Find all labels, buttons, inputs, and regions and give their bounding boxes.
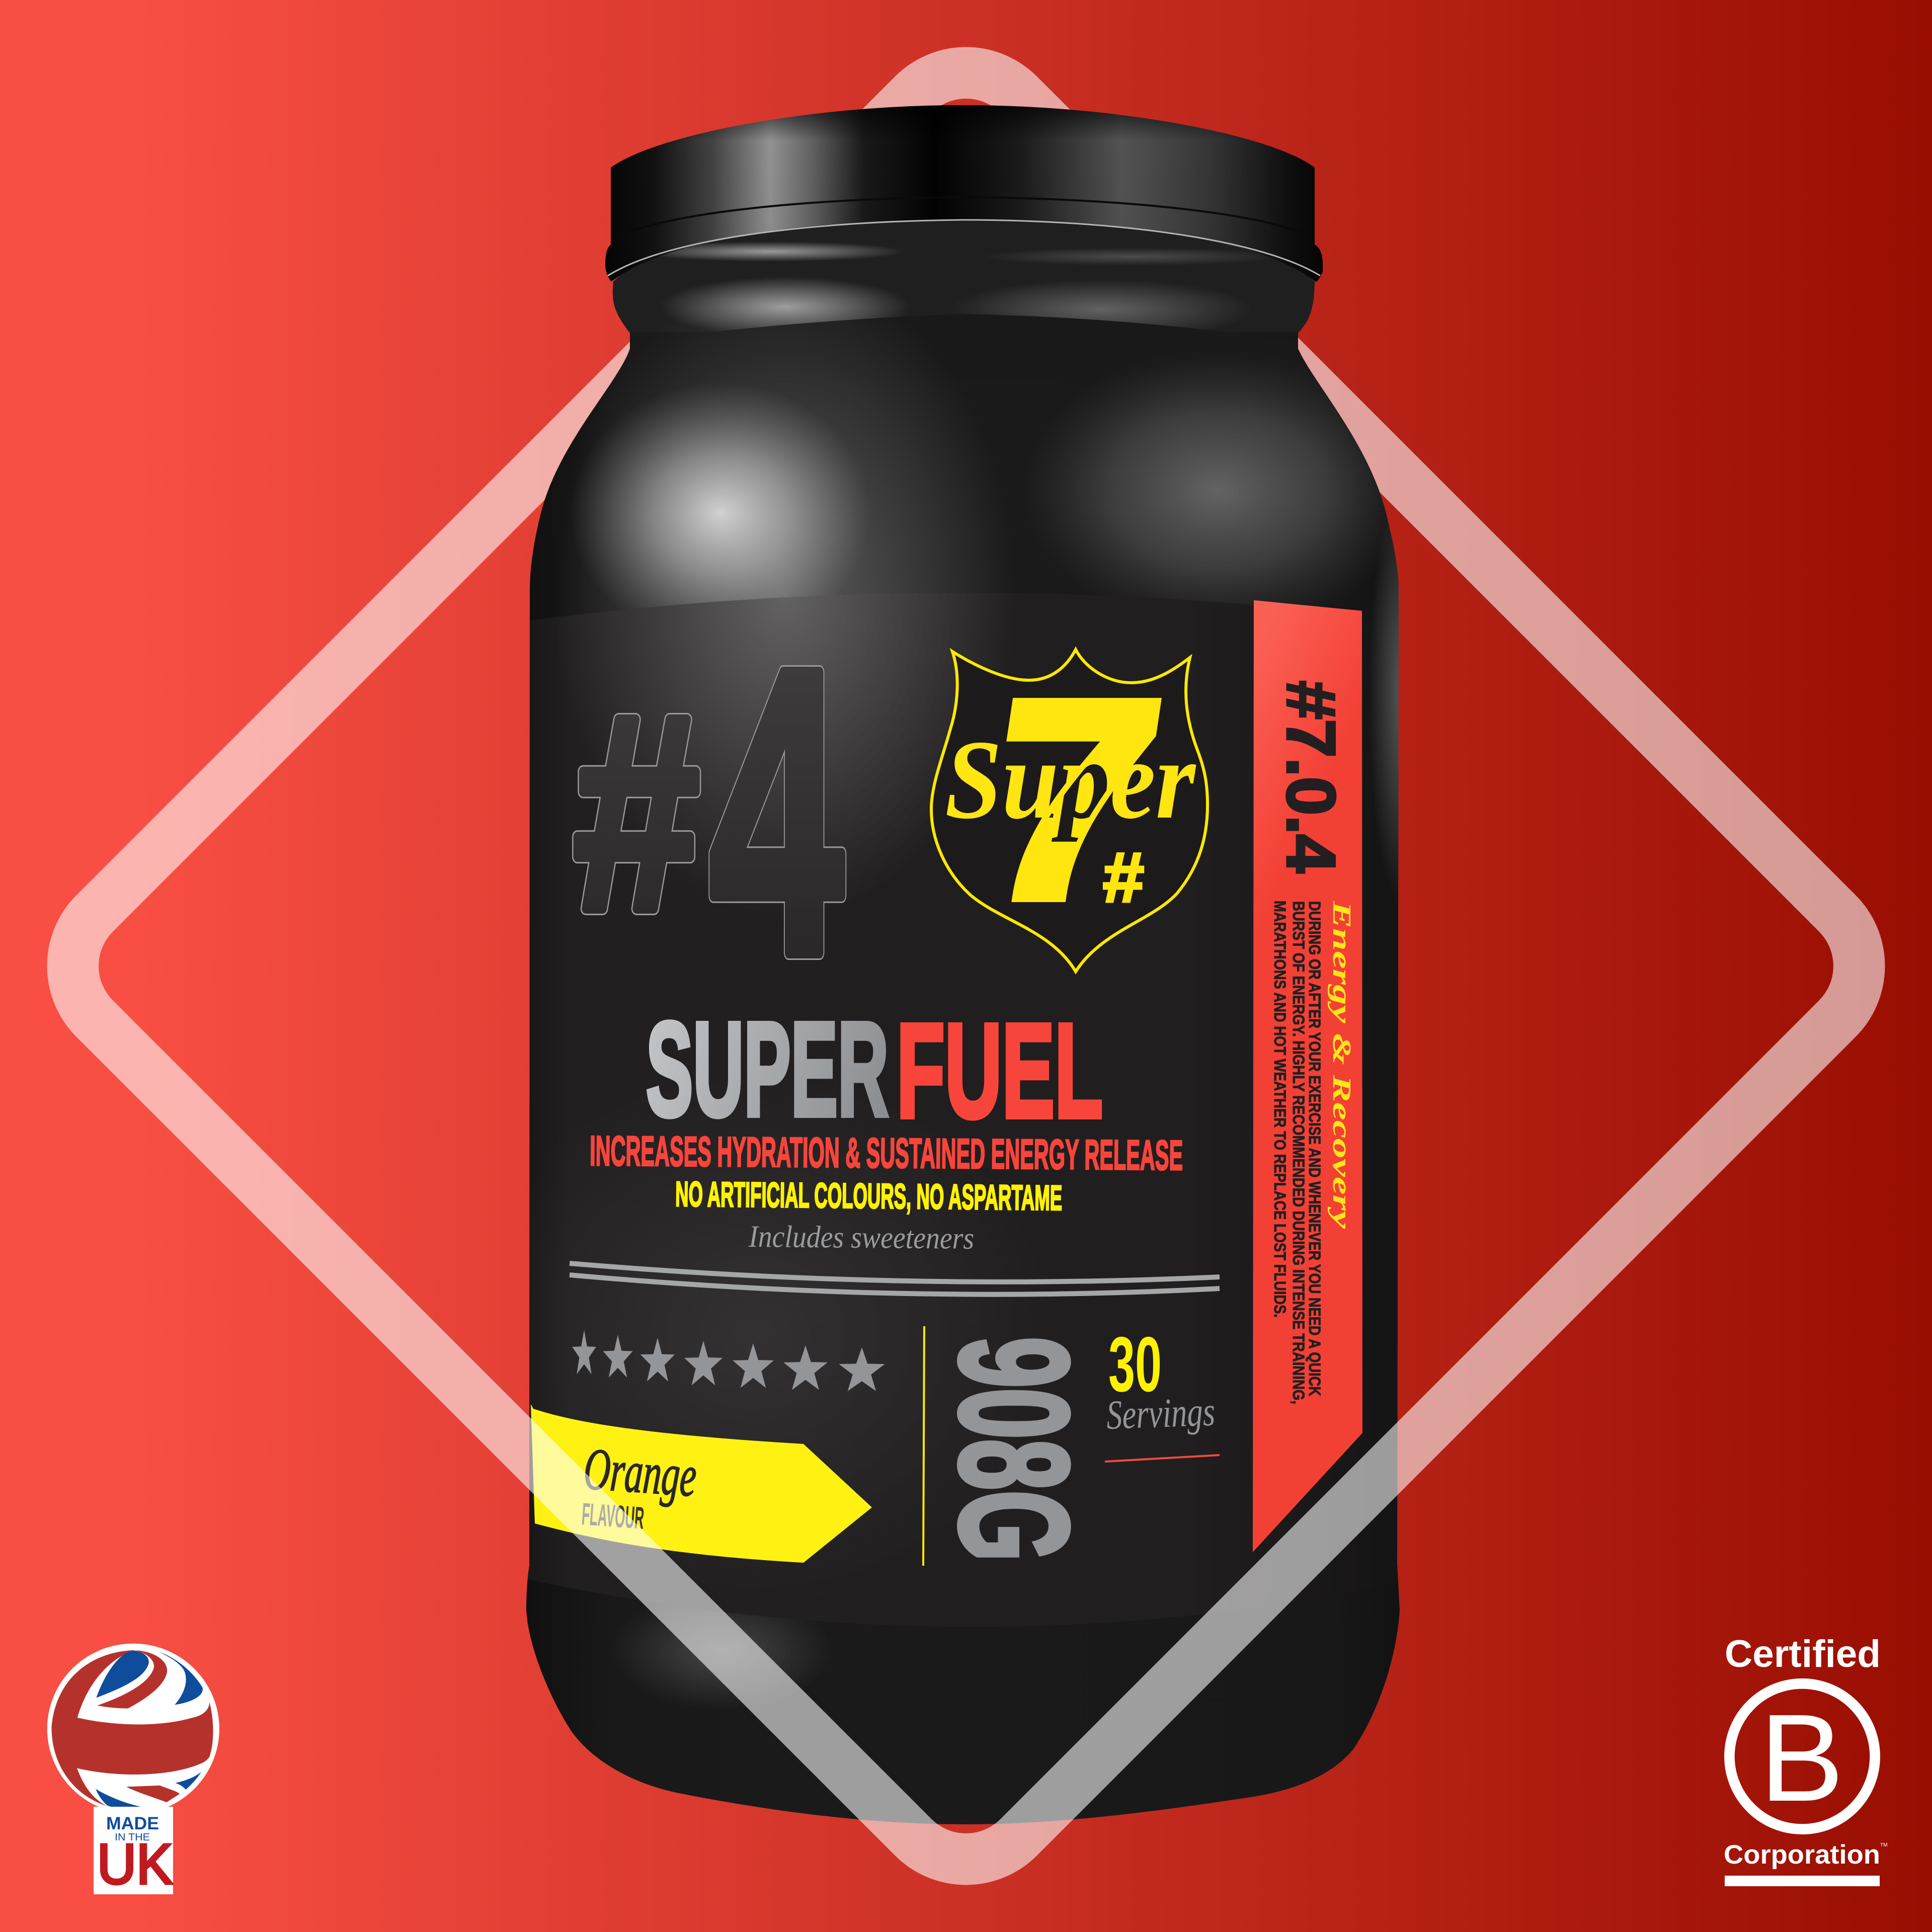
servings word: Servings — [1105, 1389, 1216, 1438]
product name SUPERFUEL: SUPER — [646, 995, 889, 1144]
seven stars — [572, 1330, 885, 1391]
outlined #4 mark: 4 — [709, 585, 845, 1039]
MADE: MADE — [106, 1814, 159, 1833]
trademark: TM — [1880, 1842, 1887, 1848]
shield outline — [931, 650, 1208, 972]
red side panel — [1253, 600, 1362, 1552]
circled B: B — [1759, 1688, 1844, 1827]
sweeteners note: Includes sweeteners — [748, 1220, 974, 1256]
diamond frame: upper half behind the jar — [47, 47, 1885, 966]
Super 7 shield logo — [931, 644, 1208, 972]
net weight 908G: 908G — [928, 1337, 1100, 1562]
servings block — [1105, 1321, 1220, 1462]
red rule — [1105, 1455, 1220, 1462]
jar lid — [605, 105, 1323, 282]
panel heading: Energy & Recovery — [1327, 900, 1356, 1229]
no artificial colours line: NO ARTIFICIAL COLOURS, NO ASPARTAME — [675, 1174, 1063, 1218]
jar shading and highlights — [570, 211, 1414, 1711]
double rule — [570, 1263, 1220, 1295]
outlined #4 mark — [574, 585, 845, 1039]
flavour name: Orange — [582, 1435, 699, 1509]
Certified: Certified — [1725, 1633, 1881, 1675]
outlined #4 mark: # — [574, 657, 699, 968]
Corporation: Corporation — [1724, 1840, 1880, 1870]
jar body — [526, 211, 1400, 1824]
badge plate — [94, 1807, 173, 1894]
outlined #4 mark: # — [574, 657, 699, 968]
text: INCREASES HYDRATION & SUSTAINED ENERGY RELEASE — [590, 1127, 1183, 1179]
number 7: 7 — [968, 644, 1176, 955]
jar label wrap — [527, 321, 1399, 1619]
yellow flavour arrow — [531, 1404, 872, 1563]
panel description: BURST OF ENERGY. HIGHLY RECOMMENDED DURING INTENSE TRAINING, — [1290, 901, 1308, 1404]
panel description: MARATHONS AND HOT WEATHER TO REPLACE LOST FLUIDS. — [1271, 901, 1289, 1318]
panel description — [1271, 901, 1324, 1404]
word Super over 7: Super — [945, 716, 1196, 842]
servings count: 30 — [1108, 1321, 1162, 1408]
IN THE: IN THE — [115, 1832, 150, 1843]
product code: #7.0.4 — [1273, 681, 1349, 873]
Certified B Corporation logo — [1724, 1633, 1887, 1886]
underline bar — [1725, 1876, 1880, 1886]
word Super behind 7: Super — [945, 716, 1196, 842]
small hash: # — [1103, 838, 1144, 917]
product name SUPERFUEL: FUEL — [897, 996, 1103, 1146]
UK: UK — [97, 1832, 173, 1896]
panel description: DURING OR AFTER YOUR EXERCISE AND WHENEVER YOU NEED A QUICK — [1306, 901, 1324, 1396]
yellow flavour arrow: FLAVOUR — [581, 1497, 646, 1536]
union flag globe — [47, 1644, 219, 1814]
outlined #4 mark: 4 — [709, 585, 845, 1039]
circled B — [1729, 1683, 1875, 1829]
supplement jar — [526, 105, 1400, 1824]
yellow divider — [923, 1326, 924, 1566]
Made in the UK badge — [47, 1644, 219, 1896]
